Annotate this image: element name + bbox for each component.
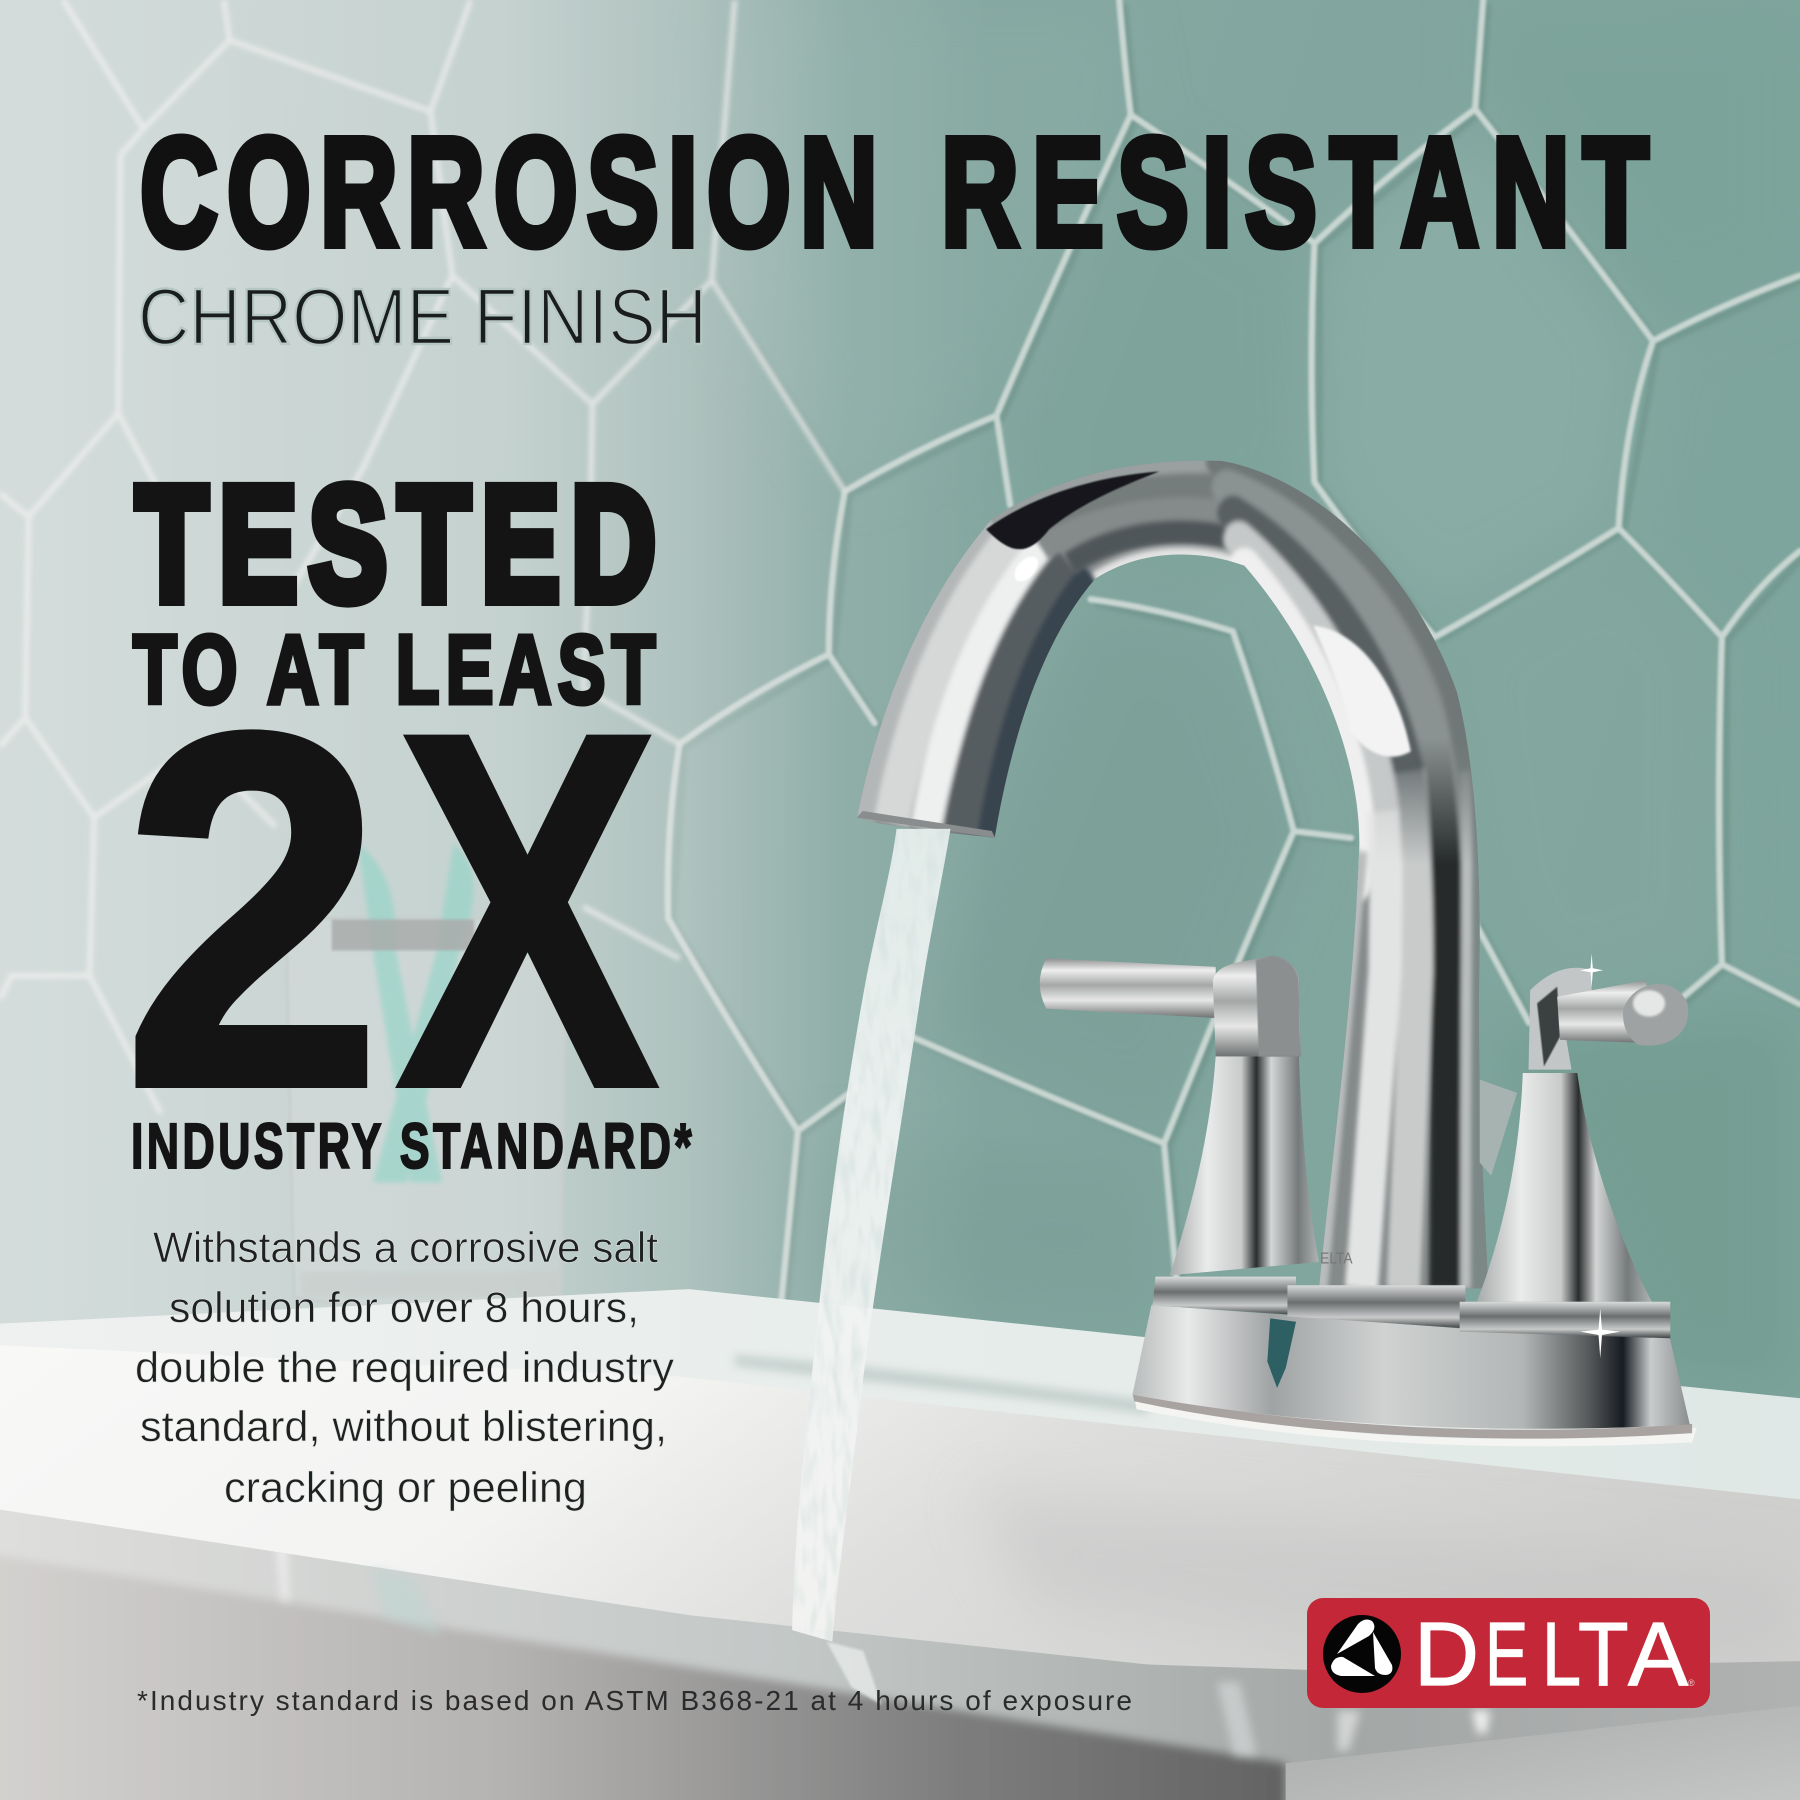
body text block: solution for over 8 hours, [169, 1284, 639, 1332]
front base panel [0, 1552, 1286, 1800]
left lever [1040, 958, 1216, 1018]
right lever end glint [1633, 990, 1665, 1017]
logo wordmark [1414, 1604, 1688, 1705]
big stat: 2X [122, 628, 661, 1193]
title: corrosion resistant [140, 107, 1649, 279]
water reflection [827, 1642, 882, 1705]
letter X: X [396, 628, 661, 1192]
footnote: *Industry standard is based on ASTM B368-21 at 4 hours of exposure [137, 1685, 1132, 1716]
base plate [1132, 1305, 1690, 1429]
body text block [135, 1224, 674, 1512]
glass outline [286, 918, 566, 1309]
water grain texture [792, 829, 951, 1642]
digit 2: 2 [122, 629, 383, 1193]
right handle neck [1529, 968, 1592, 1070]
blurred tile lines on the left [0, 0, 845, 1114]
left handle cone [1170, 1056, 1319, 1275]
spout and neck body [843, 440, 1508, 1302]
tile shading patches [717, 0, 1800, 1401]
white gasket under faucet [1134, 1396, 1697, 1446]
body text block: standard, without blistering, [140, 1403, 667, 1451]
tile grout lines [668, 0, 1800, 1320]
logo wordmark: T [1578, 1605, 1629, 1705]
right lever [1557, 980, 1652, 1043]
logo wordmark: L [1542, 1605, 1581, 1705]
Delta logo [1307, 1598, 1710, 1708]
word: corrosion: CORROSION [140, 107, 878, 279]
right back lever [1480, 1080, 1517, 1176]
left head shading [1256, 956, 1301, 1056]
word: resistant: RESISTANT [941, 107, 1649, 279]
spout underside [857, 811, 995, 838]
heading: tested: TESTED [136, 453, 656, 636]
glass rim [332, 920, 474, 951]
logo wordmark: D [1414, 1605, 1479, 1705]
dark crescent on spout [986, 472, 1159, 549]
centre collar [1287, 1285, 1465, 1328]
shadow at basin rim [735, 1355, 1148, 1414]
top bands [992, 461, 1244, 579]
bend bands [1221, 461, 1480, 884]
heading: to at least: TO AT LEAST [133, 617, 655, 725]
glass base [301, 1272, 560, 1297]
tile grout shadow [673, 3, 1800, 1324]
sink counter top surface [0, 1289, 1800, 1515]
sparkles [1580, 954, 1620, 1358]
spout glint [1011, 552, 1042, 586]
base notch [1267, 1318, 1296, 1388]
neck bands [1319, 692, 1488, 1289]
toothbrush handles [358, 844, 474, 1182]
right neck dark [1537, 987, 1560, 1066]
right collar [1460, 1302, 1670, 1338]
subtitle: chrome finish: CHROME FINISH [138, 272, 707, 361]
spout bands [857, 519, 1095, 838]
base gasket shadow [1132, 1393, 1692, 1439]
running water [792, 829, 951, 1705]
basin / front of sink [0, 1345, 1800, 1676]
engraved faucet logo: ELTA [1320, 1251, 1353, 1268]
right handle cone [1477, 1073, 1652, 1302]
body text block: double the required industry [135, 1344, 674, 1392]
body text block: Withstands a corrosive salt [153, 1224, 658, 1272]
body text block: cracking or peeling [224, 1464, 587, 1512]
logo red badge [1307, 1598, 1710, 1708]
right lever end [1623, 984, 1688, 1046]
reflections in sink front [276, 1544, 1490, 1756]
logo wordmark: E [1485, 1604, 1528, 1705]
logo circle [1323, 1615, 1401, 1693]
logo triangle petals [1331, 1620, 1392, 1676]
faucet [843, 440, 1697, 1446]
soft grey shade in basin front [976, 1492, 1800, 1659]
reflection band under the sink [0, 1510, 1800, 1800]
water stream [792, 829, 951, 1642]
faint toothbrush glass [286, 844, 566, 1309]
arch glare blob [1313, 625, 1411, 757]
registered mark: ® [1688, 1678, 1695, 1688]
left handle head [1213, 956, 1301, 1056]
left collar [1153, 1277, 1296, 1315]
heading: industry standard: INDUSTRY STANDARD* [131, 1110, 692, 1182]
logo wordmark: A [1628, 1605, 1688, 1705]
right base panel [1286, 1706, 1800, 1800]
tube base fill [857, 505, 1482, 1288]
